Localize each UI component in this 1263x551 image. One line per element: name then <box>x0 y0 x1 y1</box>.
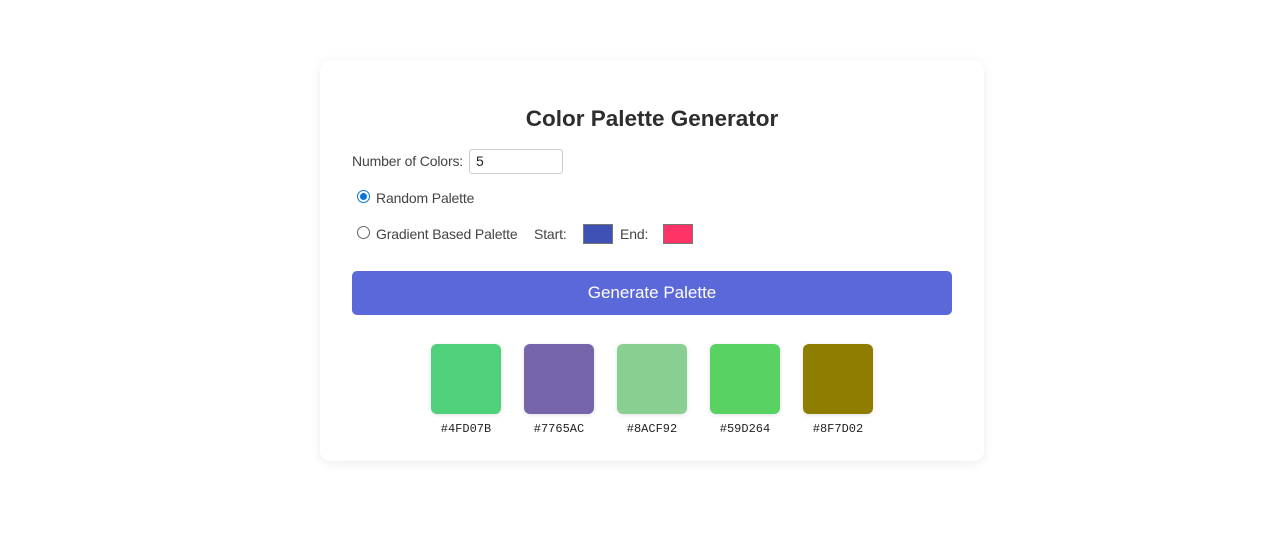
radio: random selected <box>357 190 370 203</box>
input: number <box>469 149 563 174</box>
label: number of colors: Number of Colors: <box>352 153 463 169</box>
swatch 1 <box>431 344 501 414</box>
label: start: Start: <box>534 226 567 242</box>
button: generate <box>352 271 952 315</box>
label: end: End: <box>620 226 648 242</box>
color: end <box>663 224 693 244</box>
swatch 5 <box>803 344 873 414</box>
color: start <box>583 224 613 244</box>
input: number: 5 <box>476 153 484 169</box>
hex 5: #8F7D02 <box>813 422 863 436</box>
radio: gradient <box>357 226 370 239</box>
panel: card <box>320 60 984 461</box>
button: generate: Generate Palette <box>588 283 716 302</box>
title: Color Palette Generator <box>526 106 778 131</box>
hex 4: #59D264 <box>720 422 770 436</box>
label: random palette: Random Palette <box>376 190 474 206</box>
hex 3: #8ACF92 <box>627 422 677 436</box>
label: gradient palette: Gradient Based Palette <box>376 226 517 242</box>
hex 2: #7765AC <box>534 422 584 436</box>
swatch 2 <box>524 344 594 414</box>
swatch 4 <box>710 344 780 414</box>
hex 1: #4FD07B <box>441 422 491 436</box>
swatch 3 <box>617 344 687 414</box>
